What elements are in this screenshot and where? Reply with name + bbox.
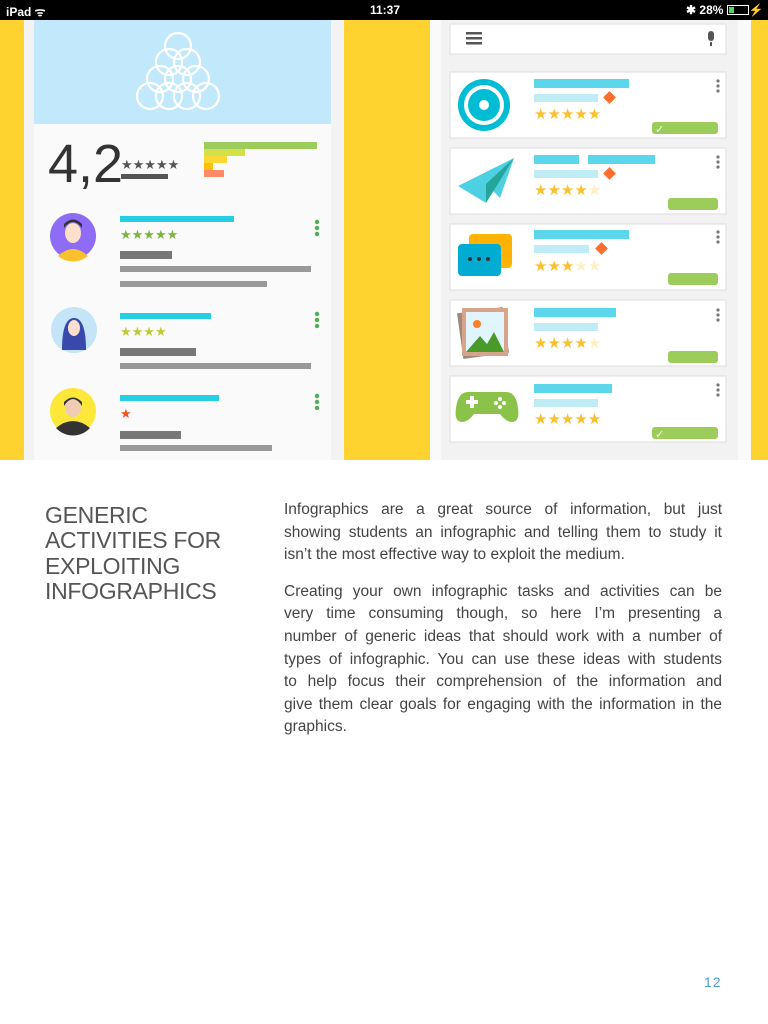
status bar: iPad ᯤ [6,5,46,19]
status bar: 11:37 [370,3,400,17]
app card 1: ★★★★★ [534,106,601,123]
title: GENERIC [45,502,148,528]
title: EXPLOITING [45,553,180,579]
body text: types of infographic. You can use these ideas with students [284,651,722,668]
panel: app store phone [430,20,751,460]
body text [284,501,722,735]
title: ACTIVITIES FOR [45,527,221,553]
app card 3: ★★★★★ [534,258,601,275]
search bar [450,24,726,54]
body text: isn’t the most effective way to exploit the medium. [284,546,625,563]
body text: give them clear goals for engaging with the information in the [284,696,722,713]
page number: 12 [704,974,722,990]
body text: very time consuming though, so here I’m presenting a [284,605,722,622]
panel: reviews phone [24,20,344,460]
title [45,502,221,604]
review 1 [50,213,319,287]
title: INFOGRAPHICS [45,578,216,604]
review 3: ★ [120,406,132,421]
app card 4: ★★★★★ [534,335,601,352]
app card 2 [450,148,726,214]
body text: to help focus their comprehension of the information and [284,673,722,690]
illustration: app screens [0,20,768,460]
body text: graphics. [284,718,347,735]
review 2 [51,307,319,369]
status bar: ✱ 28% ⚡ [686,3,764,17]
app card 1 [450,72,726,138]
app card 5 [450,376,726,442]
review 1: ★★★★★ [120,227,178,242]
review 2: ★★★★ [120,324,167,339]
status bar [0,0,768,20]
panel: reviews phone: ★★★★★ [121,157,179,172]
app card 4 [450,300,726,366]
app card 2: ★★★★★ [534,182,601,199]
review 3 [50,388,319,451]
body text: Infographics are a great source of information, but just [284,501,722,518]
body text: number of generic ideas that should work with a number of [284,628,722,645]
app card 5: ✓ [655,429,664,441]
app card 1: ✓ [655,124,664,136]
app card 3 [450,224,726,290]
body text: Creating your own infographic tasks and activities can be [284,583,722,600]
app card 5: ★★★★★ [534,411,601,428]
rating number: 4,2 [48,134,123,194]
body text: showing students an infographic and telling them to study it [284,524,722,541]
icon: circles [137,33,219,109]
bar chart: rating distribution [204,142,317,177]
